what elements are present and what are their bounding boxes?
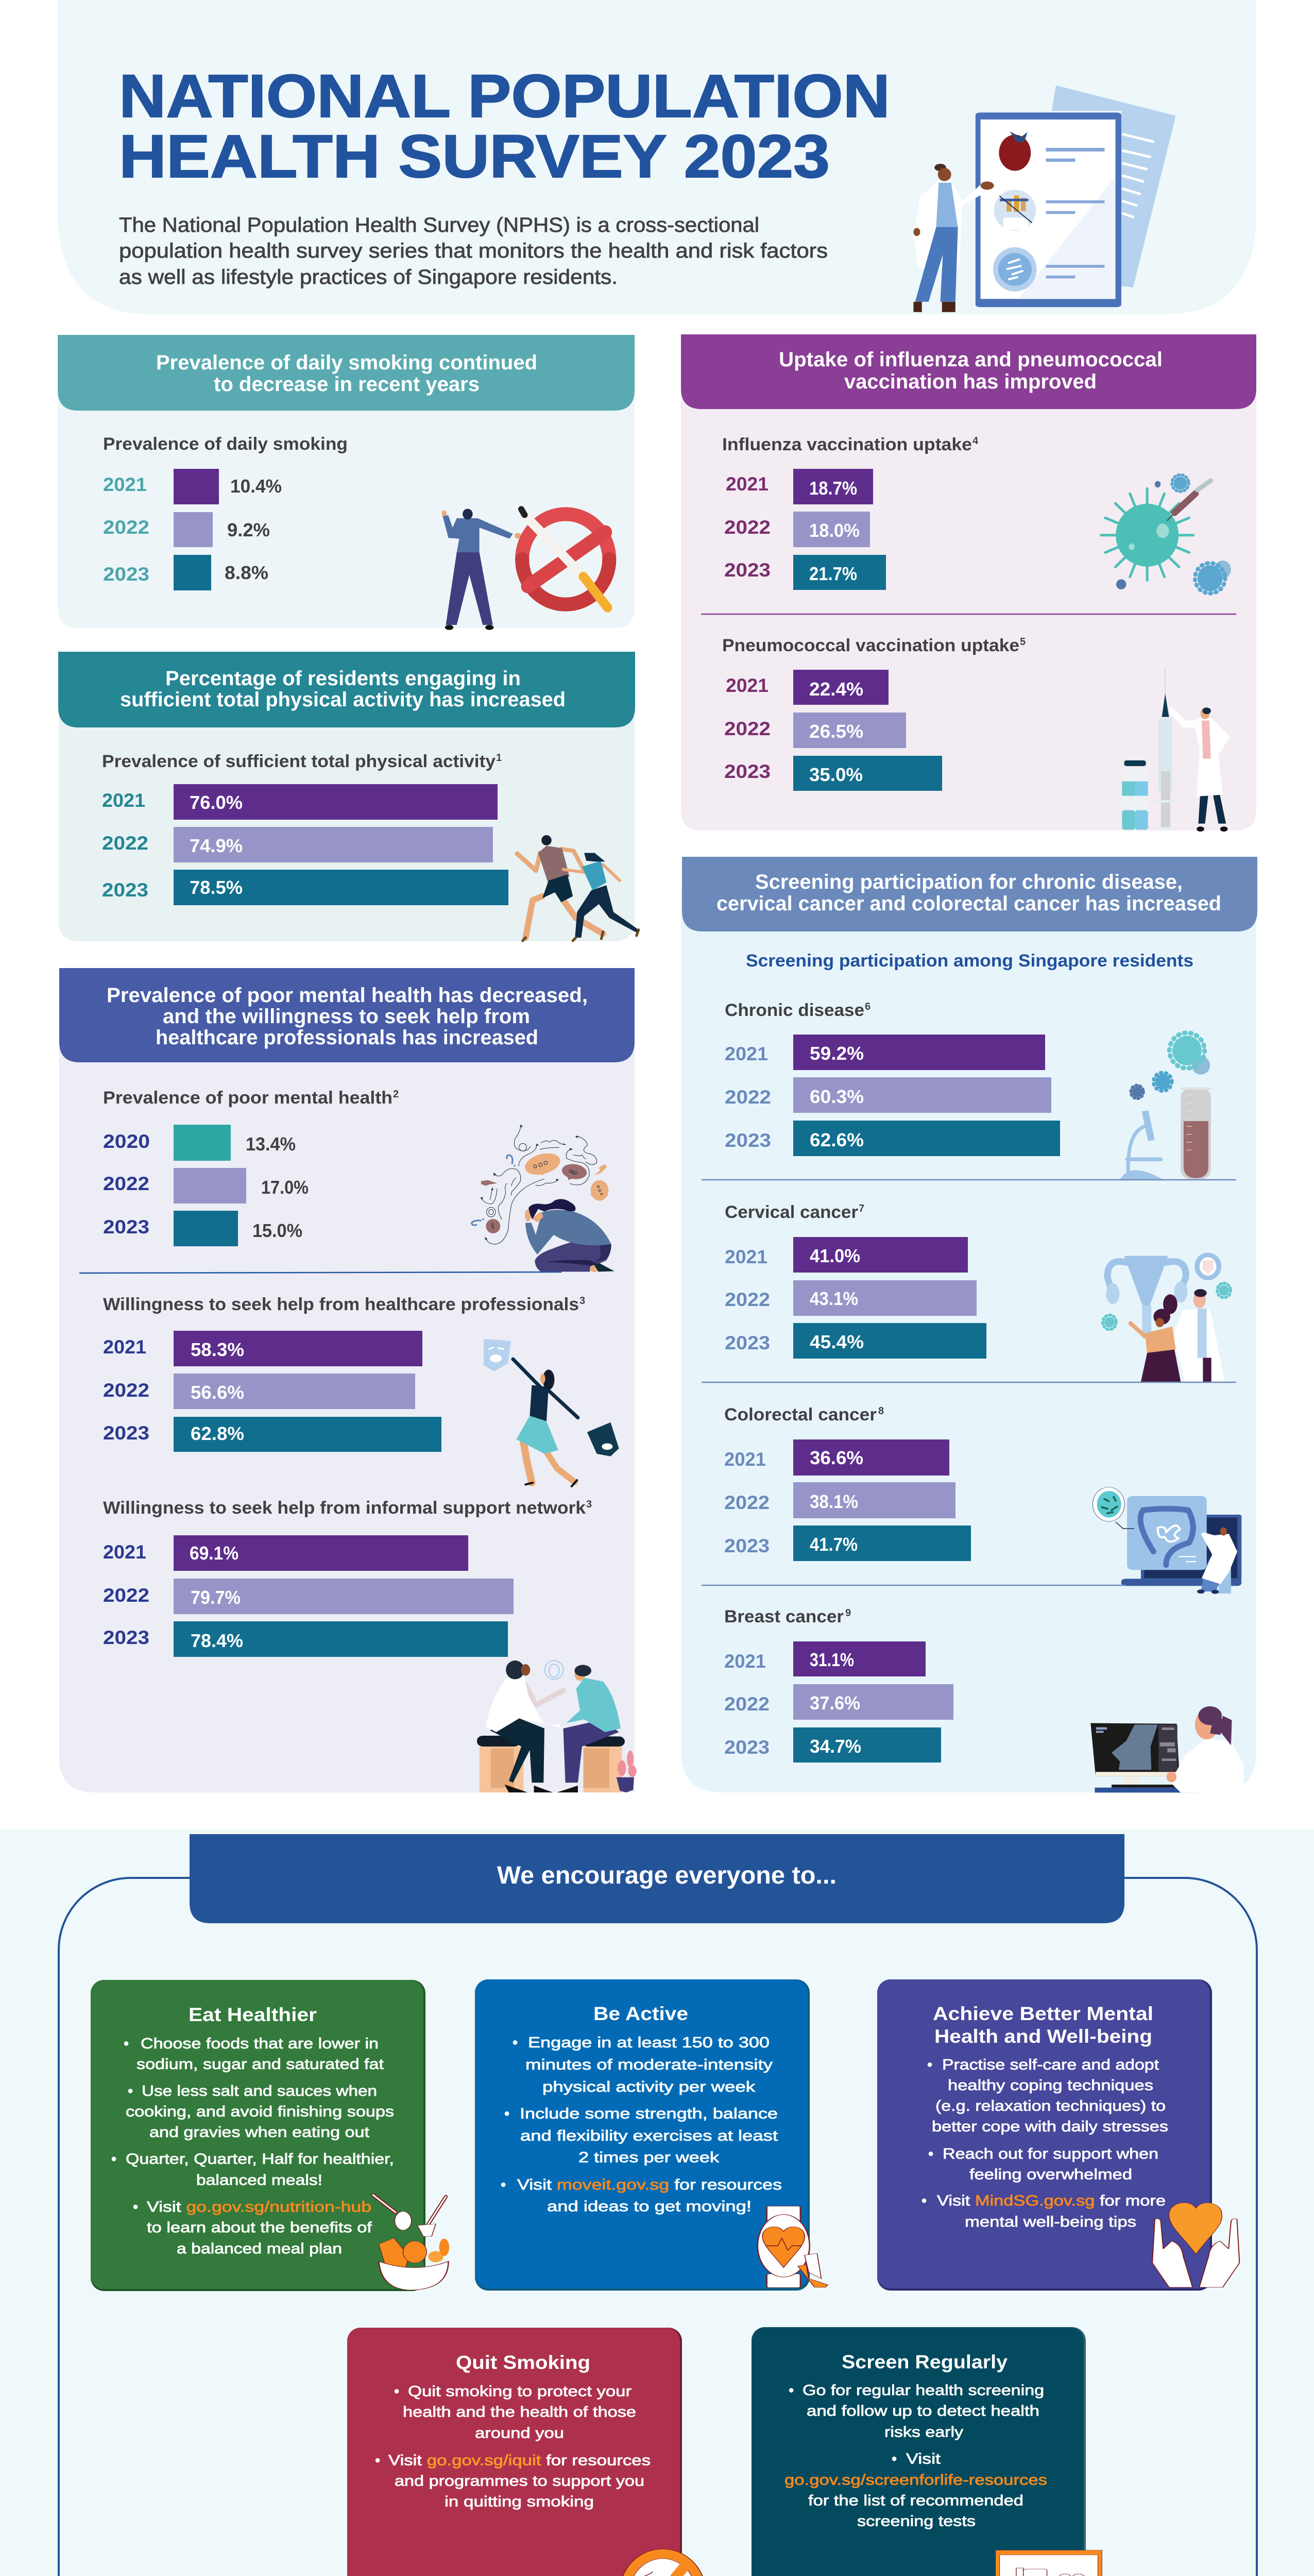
bar chart: chronic disease: 2022 [725, 1087, 771, 1108]
bar chart: informal support network: Willingness to seek help from informal support network [103, 1498, 586, 1518]
bar chart: influenza vaccination uptake: 4 [972, 435, 979, 447]
card: achieve better mental health: Visit MindSG.gov.sg for more [937, 2193, 1166, 2209]
bar chart: poor mental health: 13.4% [246, 1133, 296, 1155]
card: quit smoking: Quit smoking to protect your [408, 2383, 632, 2400]
divider and bar chart: breast cancer: 2023 [724, 1737, 770, 1758]
card: achieve better mental health: (e.g. relaxation techniques) to [935, 2098, 1166, 2114]
bar chart: poor mental health: 2020 [103, 1131, 150, 1152]
card: screen regularly: and follow up to detect health [807, 2403, 1039, 2419]
card: be active: physical activity per week [542, 2079, 756, 2095]
card: quit smoking: Visit go.gov.sg/iquit for resources [388, 2452, 651, 2469]
divider and bar chart: breast cancer: 2022 [724, 1693, 770, 1715]
icon: hands holding heart [1152, 2203, 1239, 2287]
panel: vaccination [681, 334, 1256, 832]
card: eat healthier: • [111, 2151, 116, 2167]
heading: mental health: Prevalence of poor mental health has decreased, [107, 984, 588, 1007]
card: achieve better mental health: Reach out for support when [943, 2146, 1158, 2162]
bar chart: prevalence of daily smoking: 10.4% [230, 476, 282, 497]
panel: screening [681, 857, 1257, 1792]
card: achieve better mental health: • [927, 2057, 932, 2073]
heading: screening [682, 857, 1257, 931]
bar chart: influenza vaccination uptake: 2021 [726, 473, 769, 495]
bar chart: influenza vaccination uptake: 2022 [724, 517, 771, 538]
card: eat healthier: • [128, 2083, 133, 2099]
divider and bar chart: colorectal cancer: Colorectal cancer [724, 1405, 877, 1425]
bar chart: informal support network: 69.1% [190, 1543, 238, 1564]
bar chart: informal support network: 2022 [103, 1585, 149, 1606]
divider and bar chart: colorectal cancer: 2022 [724, 1492, 770, 1513]
card: eat healthier: balanced meals! [196, 2172, 322, 2189]
heading: mental health [59, 968, 635, 1062]
heading: smoking [58, 335, 635, 411]
divider and bar chart: colorectal cancer: 8 [878, 1405, 884, 1417]
title [119, 62, 890, 191]
bar chart: informal support network [103, 1498, 592, 1657]
bar chart: poor mental health: Prevalence of poor mental health [103, 1088, 393, 1108]
card: quit smoking: in quitting smoking [445, 2494, 594, 2510]
heading: mental health: healthcare professionals has increased [156, 1026, 538, 1049]
divider and bar chart: pneumococcal vaccination uptake: Pneumococcal vaccination uptake [722, 636, 1019, 655]
card: screen regularly: • [789, 2382, 794, 2399]
bar chart: prevalence of daily smoking: 9.2% [227, 519, 270, 540]
bar chart: sufficient total physical activity: 2021 [102, 790, 145, 811]
divider and bar chart: breast cancer: 37.6% [810, 1692, 860, 1714]
card: eat healthier: Visit go.gov.sg/nutrition-hub [147, 2199, 371, 2215]
card: screen regularly: Screen Regularly [842, 2351, 1008, 2372]
heading: vaccination: vaccination has improved [844, 370, 1097, 393]
icon: colon scan with doctor [1093, 1487, 1241, 1594]
card: be active [475, 1979, 828, 2291]
bar chart: influenza vaccination uptake: 21.7% [809, 563, 857, 584]
card: screen regularly: Go for regular health screening [803, 2382, 1044, 2399]
intro text: as well as lifestyle practices of Singapore residents. [119, 266, 618, 289]
bar chart: prevalence of daily smoking: Prevalence of daily smoking [103, 434, 348, 454]
card: screen regularly: go.gov.sg/screenforlife-resources [784, 2472, 1047, 2488]
card: achieve better mental health: better cope with daily stresses [932, 2119, 1168, 2135]
bar chart: chronic disease: 59.2% [810, 1043, 864, 1064]
bar chart: informal support network: 79.7% [191, 1587, 241, 1608]
card: screen regularly [752, 2327, 1102, 2576]
card: quit smoking: health and the health of those [403, 2404, 636, 2420]
card: be active: 2 times per week [578, 2149, 720, 2166]
card: screen regularly: for the list of recommended [808, 2493, 1023, 2509]
bar chart: sufficient total physical activity [102, 752, 508, 905]
divider and bar chart: pneumococcal vaccination uptake [701, 614, 1236, 791]
heading: vaccination [681, 334, 1256, 409]
card: eat healthier: sodium, sugar and saturated fat [136, 2056, 384, 2073]
card: achieve better mental health [877, 1979, 1239, 2291]
bar chart: chronic disease: 2021 [725, 1043, 768, 1064]
heading: screening: Screening participation for chronic disease, [755, 871, 1183, 893]
bar chart: prevalence of daily smoking: 2023 [103, 564, 149, 585]
bar chart: informal support network: 3 [586, 1499, 592, 1510]
divider and bar chart: healthcare professionals: 62.8% [191, 1423, 244, 1444]
card: achieve better mental health: feeling overwhelmed [969, 2166, 1132, 2183]
divider and bar chart: pneumococcal vaccination uptake: 35.0% [809, 764, 863, 785]
divider and bar chart: colorectal cancer [702, 1382, 1236, 1561]
divider and bar chart: breast cancer: 9 [845, 1607, 851, 1619]
divider and bar chart: pneumococcal vaccination uptake: 2022 [724, 718, 771, 739]
icon: microscope and test tube [1120, 1033, 1211, 1180]
icon: doctor with tablet [913, 86, 1176, 312]
divider and bar chart: healthcare professionals: 56.6% [191, 1382, 244, 1403]
card: eat healthier: • [133, 2199, 138, 2215]
heading: screening: cervical cancer and colorectal cancer has increased [716, 892, 1221, 915]
bar chart: prevalence of daily smoking: 8.8% [225, 562, 268, 583]
card: quit smoking: Quit Smoking [456, 2352, 590, 2373]
bar chart: influenza vaccination uptake: 18.7% [809, 478, 857, 499]
subtitle: screening participation: Screening participation among Singapore residents [746, 951, 1193, 971]
card: be active: and ideas to get moving! [547, 2198, 752, 2215]
card: be active: • [513, 2035, 518, 2051]
card: eat healthier: and gravies when eating out [149, 2124, 369, 2141]
icon: man with no smoking sign [441, 509, 609, 630]
bar chart: prevalence of daily smoking [103, 434, 348, 590]
divider and bar chart: healthcare professionals: 2021 [103, 1336, 146, 1358]
card: achieve better mental health: mental well-being tips [965, 2214, 1136, 2230]
icon: monitor with health data [996, 2550, 1102, 2576]
bar chart: poor mental health: 17.0% [261, 1177, 309, 1198]
bar chart: influenza vaccination uptake: 18.0% [809, 520, 860, 541]
divider and bar chart: colorectal cancer: 38.1% [810, 1491, 858, 1512]
card: be active: • [501, 2177, 506, 2193]
intro text: The National Population Health Survey (NPHS) is a cross-sectional [119, 214, 759, 236]
divider and bar chart: cervical cancer: Cervical cancer [725, 1202, 858, 1222]
divider and bar chart: breast cancer: 31.1% [810, 1649, 854, 1670]
bar chart: sufficient total physical activity: 76.0% [190, 792, 243, 813]
divider and bar chart: pneumococcal vaccination uptake: 22.4% [809, 679, 863, 700]
bar chart: sufficient total physical activity: 1 [496, 752, 502, 764]
bar chart: sufficient total physical activity: Prevalence of sufficient total physical activity [102, 752, 496, 771]
divider and bar chart: healthcare professionals [79, 1272, 585, 1452]
card: be active: Be Active [593, 2003, 688, 2024]
card: eat healthier: Use less salt and sauces when [142, 2083, 377, 2099]
card: achieve better mental health: Achieve Better Mental [933, 2003, 1153, 2024]
bar chart: chronic disease: 60.3% [810, 1086, 864, 1107]
icon: distressed woman with swirling thoughts [472, 1124, 615, 1272]
divider and bar chart: healthcare professionals: 58.3% [191, 1339, 244, 1360]
divider and bar chart: pneumococcal vaccination uptake: 2021 [726, 675, 769, 696]
heading: smoking: to decrease in recent years [214, 373, 480, 396]
icon: woman with masks [484, 1339, 619, 1486]
panel: header [58, 0, 1256, 314]
bar chart: chronic disease: 62.6% [810, 1129, 864, 1150]
card: achieve better mental health: healthy coping techniques [948, 2077, 1153, 2094]
icon: runners [517, 835, 639, 941]
heading tab: we encourage everyone to: We encourage everyone to... [497, 1862, 837, 1889]
bar chart: sufficient total physical activity: 74.9% [190, 835, 243, 856]
card: quit smoking: • [375, 2452, 380, 2469]
card: screen regularly: screening tests [857, 2513, 976, 2530]
card: quit smoking: around you [475, 2425, 564, 2442]
divider and bar chart: cervical cancer: 7 [859, 1203, 864, 1214]
divider and bar chart: cervical cancer: 2022 [725, 1289, 770, 1310]
card: eat healthier: Eat Healthier [189, 2004, 317, 2025]
divider and bar chart: cervical cancer [702, 1180, 1236, 1359]
bar chart: influenza vaccination uptake: Influenza vaccination uptake [722, 435, 972, 454]
title: HEALTH SURVEY 2023 [119, 123, 830, 191]
card: screen regularly: risks early [884, 2424, 964, 2441]
heading: vaccination: Uptake of influenza and pneumococcal [779, 348, 1163, 371]
divider and bar chart: colorectal cancer: 2021 [724, 1449, 766, 1470]
divider and bar chart: breast cancer [702, 1585, 1126, 1762]
divider and bar chart: pneumococcal vaccination uptake: 26.5% [809, 721, 863, 742]
divider and bar chart: pneumococcal vaccination uptake: 2023 [724, 761, 771, 782]
card: quit smoking: and programmes to support you [395, 2473, 644, 2489]
bar chart: poor mental health: 2 [393, 1089, 399, 1100]
divider and bar chart: cervical cancer: 43.1% [810, 1288, 858, 1309]
panel: daily smoking [58, 335, 635, 630]
bar chart: sufficient total physical activity: 2022 [102, 833, 148, 854]
divider and bar chart: breast cancer: 2021 [724, 1651, 766, 1672]
icon: radiographer with mammogram monitor [1090, 1706, 1243, 1792]
divider and bar chart: healthcare professionals: 3 [579, 1295, 585, 1307]
divider and bar chart: healthcare professionals: Willingness to seek help from healthcare professionals [103, 1295, 579, 1314]
bar chart: influenza vaccination uptake [722, 435, 979, 590]
panel: mental health [59, 968, 637, 1792]
icon: virus and syringe [1101, 475, 1231, 594]
divider and bar chart: cervical cancer: 41.0% [810, 1245, 860, 1266]
bar chart: sufficient total physical activity: 2023 [102, 879, 148, 901]
card: screen regularly: Visit [906, 2451, 941, 2467]
intro text [119, 214, 828, 289]
icon: smartwatch with heart and shoe [758, 2206, 828, 2287]
card: achieve better mental health: • [921, 2193, 927, 2209]
panel: physical activity [58, 652, 639, 941]
bar chart: chronic disease: Chronic disease [725, 1001, 864, 1020]
panel: encouragement section [0, 1829, 1314, 2576]
divider and bar chart: breast cancer: Breast cancer [724, 1607, 844, 1626]
bar chart: chronic disease: 2023 [725, 1130, 771, 1151]
card: eat healthier: Choose foods that are lower in [141, 2036, 379, 2052]
icon: doctor with syringe and vial [1122, 668, 1230, 832]
bar chart: poor mental health [103, 1088, 399, 1246]
card: achieve better mental health: • [928, 2146, 933, 2162]
bar chart: poor mental health: 2022 [103, 1173, 149, 1194]
heading tab: we encourage everyone to [190, 1834, 1124, 1923]
divider and bar chart: pneumococcal vaccination uptake: 5 [1020, 636, 1026, 648]
heading: physical activity [58, 652, 635, 727]
card: be active: Visit moveit.gov.sg for resources [517, 2177, 782, 2193]
divider and bar chart: colorectal cancer: 2023 [724, 1535, 770, 1556]
heading: physical activity: sufficient total physical activity has increased [120, 688, 566, 711]
card: eat healthier: to learn about the benefits of [147, 2219, 372, 2236]
divider and bar chart: colorectal cancer: 41.7% [810, 1534, 858, 1555]
card: quit smoking [347, 2328, 706, 2576]
divider and bar chart: colorectal cancer: 36.6% [810, 1447, 863, 1468]
bar chart: informal support network: 78.4% [191, 1630, 243, 1651]
divider and bar chart: breast cancer: 34.7% [810, 1736, 861, 1757]
bar chart: poor mental health: 15.0% [252, 1220, 302, 1241]
icon: salad bowl [373, 2195, 449, 2290]
title: NATIONAL POPULATION [119, 62, 890, 130]
card: achieve better mental health: Health and Well-being [934, 2026, 1152, 2047]
icon: uterus with woman and doctor [1103, 1252, 1231, 1382]
card: screen regularly: • [892, 2451, 897, 2467]
bar chart: chronic disease [725, 1001, 1060, 1156]
card: eat healthier: Quarter, Quarter, Half for healthier, [126, 2151, 394, 2167]
card: quit smoking: • [394, 2383, 399, 2400]
card: be active: • [504, 2106, 509, 2122]
icon: no smoking sign [620, 2549, 706, 2576]
card: be active: and flexibility exercises at least [520, 2128, 778, 2144]
divider and bar chart: cervical cancer: 45.4% [810, 1331, 864, 1352]
card: eat healthier [91, 1980, 449, 2291]
card: achieve better mental health: Practise self-care and adopt [942, 2057, 1159, 2073]
card: eat healthier: • [124, 2036, 129, 2052]
divider and bar chart: cervical cancer: 2021 [725, 1246, 767, 1267]
bar chart: informal support network: 2023 [103, 1627, 149, 1648]
bar chart: informal support network: 2021 [103, 1541, 146, 1563]
bar chart: influenza vaccination uptake: 2023 [724, 560, 771, 581]
card: be active: Include some strength, balance [520, 2106, 778, 2122]
bar chart: poor mental health: 2023 [103, 1216, 149, 1238]
heading: smoking: Prevalence of daily smoking continued [156, 351, 537, 374]
heading: physical activity: Percentage of residents engaging in [165, 667, 521, 690]
card: eat healthier: cooking, and avoid finishing soups [126, 2104, 394, 2120]
divider and bar chart: healthcare professionals: 2022 [103, 1380, 149, 1401]
intro text: population health survey series that monitors the health and risk factors [119, 240, 828, 262]
icon: two people talking [477, 1660, 637, 1792]
card: be active: Engage in at least 150 to 300 [528, 2035, 770, 2051]
bar chart: chronic disease: 6 [865, 1001, 871, 1012]
bar chart: prevalence of daily smoking: 2022 [103, 517, 149, 538]
heading: mental health: and the willingness to seek help from [163, 1005, 530, 1028]
divider and bar chart: cervical cancer: 2023 [725, 1332, 770, 1353]
bar chart: prevalence of daily smoking: 2021 [103, 474, 147, 495]
bar chart: sufficient total physical activity: 78.5% [190, 877, 243, 898]
divider and bar chart: healthcare professionals: 2023 [103, 1422, 149, 1444]
card: eat healthier: a balanced meal plan [177, 2241, 342, 2257]
card: be active: minutes of moderate-intensity [525, 2057, 773, 2073]
